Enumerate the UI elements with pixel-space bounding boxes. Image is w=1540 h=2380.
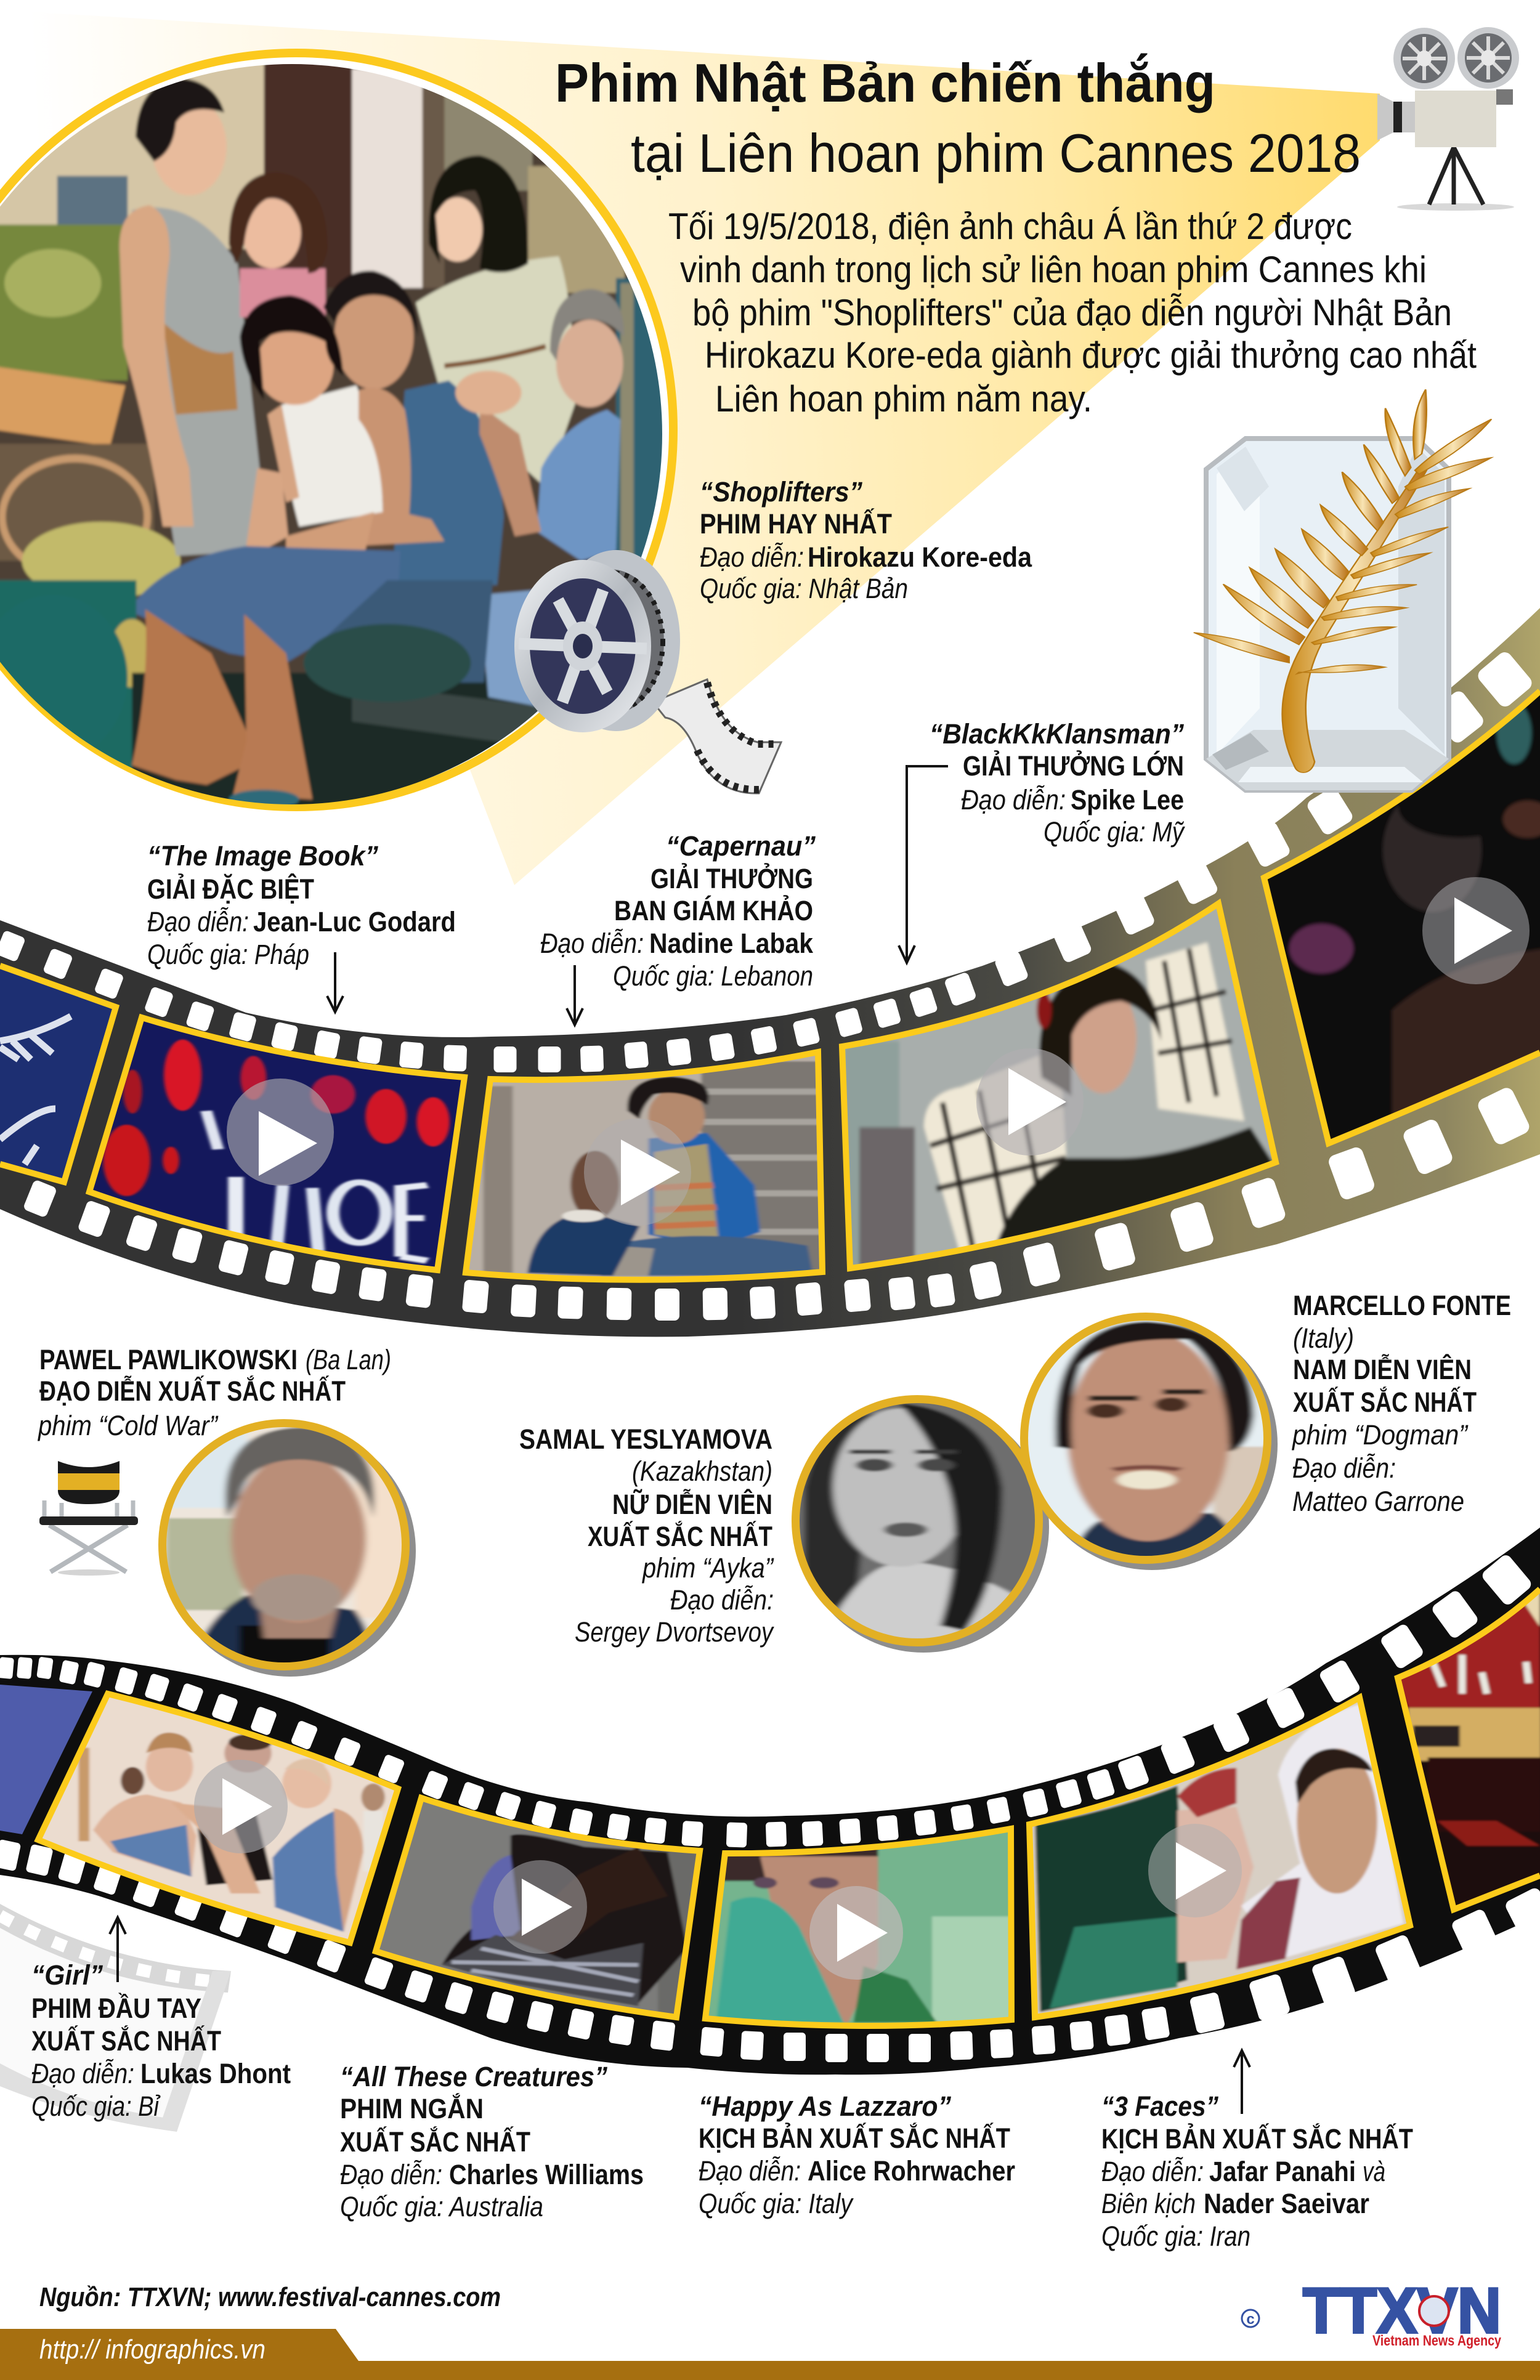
frame: Girl <box>30 1687 412 1948</box>
caption: Shoplifters: Quốc gia: Nhật Bản <box>700 573 908 604</box>
caption: Samal Yeslyamova: Đạo diễn: <box>670 1584 774 1616</box>
caption: Samal Yeslyamova <box>519 1423 774 1648</box>
caption: Capernaum: “Capernau” <box>666 830 816 862</box>
caption: Girl: Lukas Dhont <box>140 2058 291 2089</box>
caption: Pawel Pawlikowski: phim “Cold War” <box>37 1410 219 1441</box>
caption: Pawel Pawlikowski <box>37 1344 391 1441</box>
intro paragraph: Tối 19/5/2018, điện ảnh châu Á lần thứ 2 được <box>668 206 1352 247</box>
frame: Capernaum <box>460 1048 837 1284</box>
caption: Capernaum <box>540 830 816 992</box>
caption: All These Creatures <box>340 2061 644 2222</box>
upper perforations <box>0 649 1534 1072</box>
panel: top film strip <box>0 608 1540 1337</box>
frame: Happy As Lazzaro <box>696 1821 1020 2033</box>
portrait: Samal Yeslyamova <box>784 1396 1056 1653</box>
arrow: to Capernaum frame <box>567 965 583 1025</box>
lower perforations <box>23 1085 1532 1321</box>
caption: Shoplifters: Đạo diễn: <box>700 541 804 573</box>
caption: The Image Book: “The Image Book” <box>147 840 378 872</box>
caption: Samal Yeslyamova: NỮ DIỄN VIÊN <box>612 1489 772 1520</box>
caption: BlackKkKlansman: GIẢI THƯỞNG LỚN <box>963 750 1184 782</box>
caption: 3 Faces: và <box>1363 2156 1385 2187</box>
caption: Shoplifters: “Shoplifters” <box>700 476 862 508</box>
title: Phim Nhật Bản chiến thắng <box>555 52 1215 113</box>
caption: Girl: PHIM ĐẦU TAY <box>31 1993 201 2024</box>
caption: Capernaum: Đạo diễn: <box>540 928 644 959</box>
caption: BlackKkKlansman: Spike Lee <box>1071 784 1184 816</box>
caption: Capernaum: Nadine Labak <box>649 928 814 959</box>
caption: Happy As Lazzaro: Alice Rohrwacher <box>808 2155 1015 2187</box>
caption: Marcello Fonte: Matteo Garrone <box>1292 1486 1464 1517</box>
caption: Girl: Đạo diễn: <box>31 2058 134 2089</box>
caption: Marcello Fonte: XUẤT SẮC NHẤT <box>1293 1386 1477 1418</box>
caption: 3 Faces: Nader Saeivar <box>1204 2188 1369 2219</box>
caption: Girl <box>31 1959 291 2122</box>
intro paragraph: vinh danh trong lịch sử liên hoan phim Cannes khi <box>680 249 1427 290</box>
caption: Shoplifters <box>700 476 1032 604</box>
portrait: Marcello Fonte <box>1015 1311 1278 1570</box>
caption: 3 Faces <box>1101 2091 1413 2252</box>
caption: BlackKkKlansman: “BlackKkKlansman” <box>930 718 1184 750</box>
icon: golden palm leaf <box>1194 389 1491 772</box>
shorts <box>136 546 400 663</box>
website link: http:// infographics.vn <box>39 2334 265 2365</box>
caption: Capernaum: Quốc gia: Lebanon <box>613 960 813 992</box>
caption: The Image Book: Quốc gia: Pháp <box>147 939 309 970</box>
caption: Marcello Fonte: phim “Dogman” <box>1291 1419 1469 1451</box>
caption: The Image Book <box>147 840 456 970</box>
caption: Marcello Fonte: (Italy) <box>1293 1322 1354 1354</box>
copyright mark <box>1242 2310 1259 2328</box>
old woman <box>537 410 620 561</box>
arrow: to BlackKkKlansman frame <box>899 766 948 963</box>
caption: Girl: XUẤT SẮC NHẤT <box>31 2025 221 2057</box>
caption: Marcello Fonte <box>1291 1290 1511 1517</box>
portrait: Pawel Pawlikowski <box>156 1416 421 1677</box>
intro paragraph: Hirokazu Kore-eda giành được giải thưởng cao nhất <box>705 334 1477 376</box>
caption: Shoplifters: Hirokazu Kore-eda <box>808 541 1032 573</box>
frame: dark film still <box>1257 671 1540 1158</box>
caption: Marcello Fonte: Đạo diễn: <box>1292 1452 1396 1484</box>
icon: film projector <box>1377 27 1519 211</box>
caption: Capernaum: GIẢI THƯỞNG <box>650 863 813 894</box>
frame: festival poster <box>0 961 123 1189</box>
caption: Happy As Lazzaro: Quốc gia: Italy <box>699 2188 854 2219</box>
caption: Samal Yeslyamova: SAMAL YESLYAMOVA <box>519 1423 772 1455</box>
caption: Pawel Pawlikowski: PAWEL PAWLIKOWSKI <box>39 1344 298 1375</box>
arrow: to The Image Book frame <box>327 952 343 1012</box>
caption: Happy As Lazzaro <box>699 2091 1015 2219</box>
title: tại Liên hoan phim Cannes 2018 <box>631 123 1361 184</box>
caption: All These Creatures: Đạo diễn: <box>340 2159 442 2190</box>
title <box>555 52 1361 184</box>
intro paragraph: bộ phim "Shoplifters" của đạo diễn người Nhật Bản <box>692 292 1452 333</box>
source line: Nguồn: TTXVN; www.festival-cannes.com <box>39 2282 501 2312</box>
panel: bottom film strip <box>0 1528 1540 2074</box>
logo: TTXVN: TTXVN <box>1303 2275 1501 2347</box>
caption: 3 Faces: Quốc gia: Iran <box>1101 2220 1250 2252</box>
caption: All These Creatures: Quốc gia: Australia <box>340 2191 543 2222</box>
photo: Shoplifters family <box>0 64 662 804</box>
caption: BlackKkKlansman: Quốc gia: Mỹ <box>1044 816 1185 848</box>
frame: Cannes theatre <box>1388 1574 1540 1909</box>
caption: Samal Yeslyamova: phim “Ayka” <box>641 1552 774 1584</box>
caption: The Image Book: GIẢI ĐẶC BIỆT <box>147 873 314 905</box>
frame: BlackKkKlansman <box>832 893 1287 1287</box>
woman left <box>132 208 259 556</box>
arrow: to 3 Faces frame <box>1234 2050 1250 2114</box>
upper perforations <box>0 1553 1533 1848</box>
arrow: to Girl frame <box>110 1917 126 1982</box>
caption: 3 Faces: “3 Faces” <box>1101 2091 1218 2122</box>
girl <box>240 269 326 317</box>
caption: Pawel Pawlikowski: ĐẠO DIỄN XUẤT SẮC NHẤT <box>39 1375 346 1407</box>
logo: TTXVN: Vietnam News Agency <box>1372 2333 1502 2349</box>
caption: Shoplifters: PHIM HAY NHẤT <box>700 508 892 540</box>
legs <box>132 609 251 785</box>
arms and hands <box>244 468 288 561</box>
caption: 3 Faces: Jafar Panahi <box>1209 2156 1356 2187</box>
caption: Happy As Lazzaro: “Happy As Lazzaro” <box>699 2091 951 2122</box>
caption: BlackKkKlansman <box>930 718 1185 848</box>
frame: 3 Faces <box>1025 1694 1418 2019</box>
lower perforations <box>0 1839 1540 2062</box>
intro paragraph: Liên hoan phim năm nay. <box>715 378 1092 419</box>
footer band <box>0 2329 1540 2380</box>
caption: All These Creatures: PHIM NGẮN <box>340 2093 484 2124</box>
blurred foreground <box>304 624 471 702</box>
faded film strip behind Girl caption <box>0 1904 231 2132</box>
man <box>334 284 413 389</box>
caption: All These Creatures: Charles Williams <box>449 2159 644 2190</box>
caption: Happy As Lazzaro: KỊCH BẢN XUẤT SẮC NHẤT <box>699 2123 1010 2154</box>
projector light beam <box>0 12 1380 885</box>
caption: Marcello Fonte: NAM DIỄN VIÊN <box>1293 1354 1472 1385</box>
caption: Pawel Pawlikowski: (Ba Lan) <box>306 1344 391 1375</box>
caption: 3 Faces: Đạo diễn: <box>1101 2156 1204 2187</box>
caption: Capernaum: BAN GIÁM KHẢO <box>614 895 813 926</box>
icon: crystal block with golden palm <box>1194 389 1491 790</box>
caption: The Image Book: Jean-Luc Godard <box>253 906 456 937</box>
caption: The Image Book: Đạo diễn: <box>147 906 249 937</box>
boy <box>282 386 383 527</box>
icon: film reel with film tail <box>514 550 781 793</box>
play buttons <box>194 1760 1242 1980</box>
frame: blue panel <box>0 1685 92 1834</box>
caption: 3 Faces: KỊCH BẢN XUẤT SẮC NHẤT <box>1101 2123 1413 2155</box>
copyright mark: c <box>1246 2311 1255 2328</box>
caption: Girl: “Girl” <box>31 1959 103 1991</box>
panel: main film photo in circle <box>0 44 695 833</box>
caption: Samal Yeslyamova: (Kazakhstan) <box>632 1455 772 1487</box>
caption: Happy As Lazzaro: Đạo diễn: <box>699 2155 801 2187</box>
caption: All These Creatures: “All These Creatures” <box>340 2061 607 2092</box>
intro paragraph <box>668 206 1477 419</box>
caption: All These Creatures: XUẤT SẮC NHẤT <box>340 2126 530 2158</box>
frame: All These Creatures <box>368 1792 712 2023</box>
caption: BlackKkKlansman: Đạo diễn: <box>961 784 1066 816</box>
caption: Girl: Quốc gia: Bỉ <box>31 2091 161 2122</box>
woman right <box>416 256 577 488</box>
frame: The Image Book <box>76 1014 477 1276</box>
play buttons <box>227 877 1530 1226</box>
caption: 3 Faces: Biên kịch <box>1101 2188 1196 2219</box>
icon: director chair <box>39 1461 138 1576</box>
caption: Samal Yeslyamova: Sergey Dvortsevoy <box>575 1616 774 1648</box>
caption: Samal Yeslyamova: XUẤT SẮC NHẤT <box>588 1521 772 1552</box>
